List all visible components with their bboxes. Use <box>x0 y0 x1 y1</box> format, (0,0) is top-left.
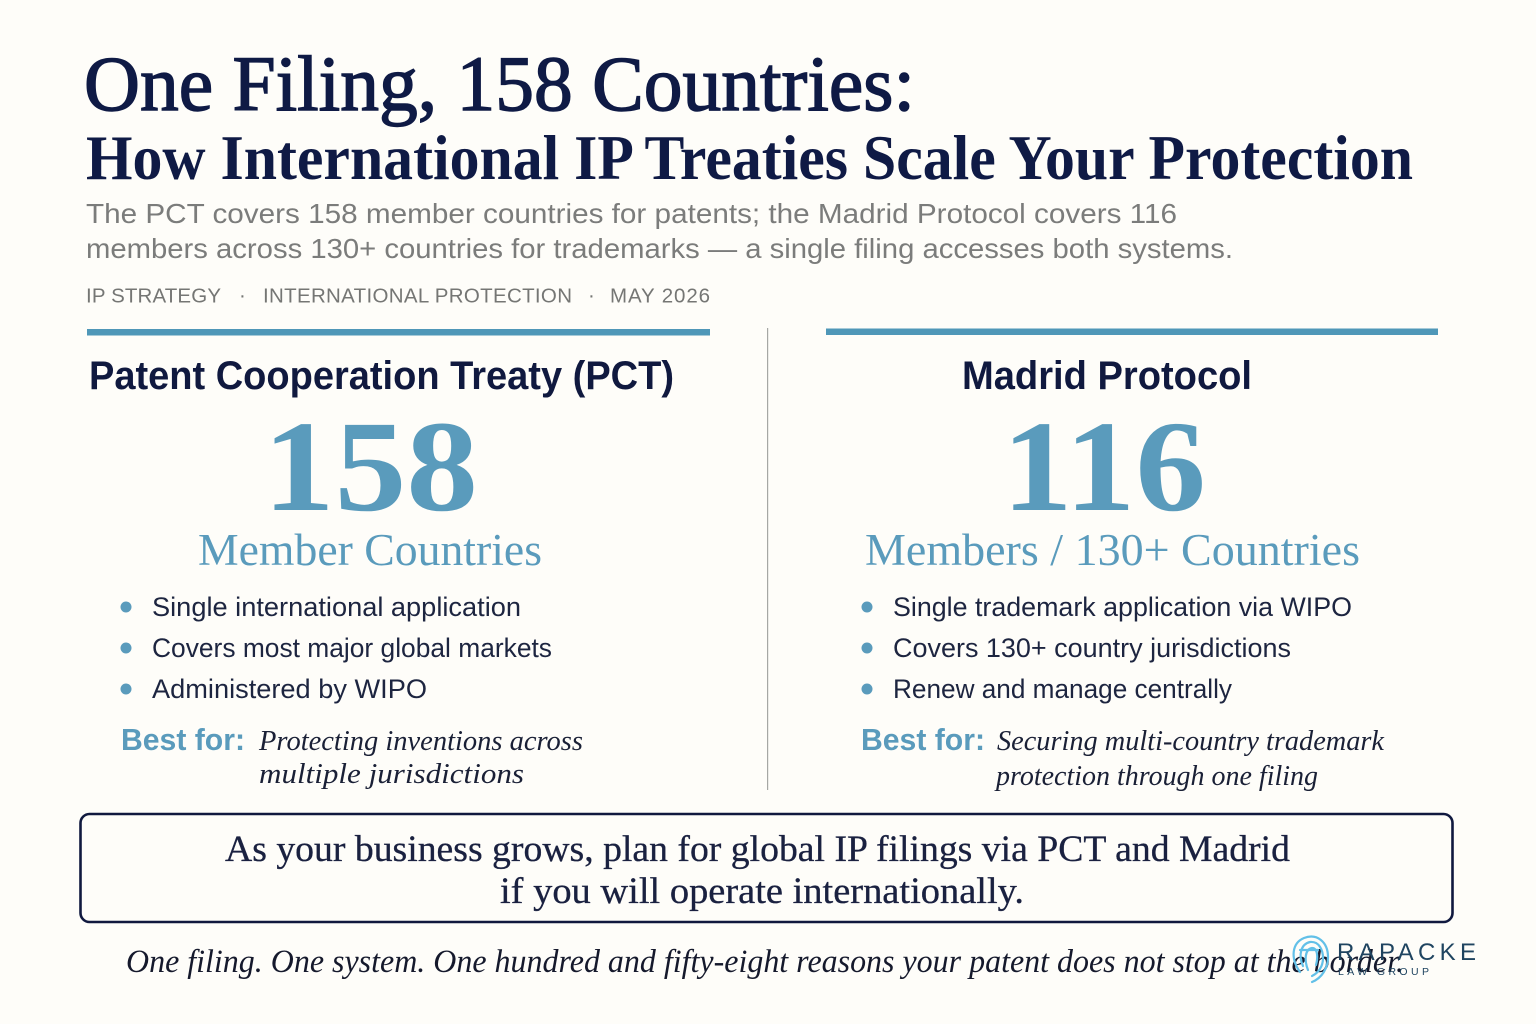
logo <box>1294 937 1476 982</box>
Madrid best for: Best for: <box>861 722 985 757</box>
PCT heading: Patent Cooperation Treaty (PCT) <box>89 354 674 398</box>
Madrid bullets: Renew and manage centrally <box>893 674 1232 704</box>
logo wordmark: LAW GROUP <box>1338 966 1429 978</box>
logo wordmark: RAPACKE <box>1337 939 1476 966</box>
panel: PCT <box>87 329 710 790</box>
title: One Filing, 158 Countries: <box>84 40 915 127</box>
Madrid bullets: Covers 130+ country jurisdictions <box>893 633 1291 663</box>
meta line: · <box>588 284 595 307</box>
title <box>84 40 1413 193</box>
Madrid best for: protection through one filing <box>994 760 1318 792</box>
Madrid heading: Madrid Protocol <box>962 354 1252 398</box>
Madrid number label: Members / 130+ Countries <box>865 525 1360 575</box>
Madrid best for: Securing multi-country trademark <box>997 725 1385 757</box>
Madrid top rule <box>826 328 1438 335</box>
PCT bullets <box>120 592 552 704</box>
logo wordmark <box>1337 939 1476 978</box>
meta line: · <box>239 284 246 307</box>
PCT bullets: Single international application <box>152 592 521 622</box>
callout: if you will operate internationally. <box>500 871 1024 912</box>
PCT bullets: Administered by WIPO <box>152 674 427 704</box>
panel: Madrid <box>826 328 1438 792</box>
subtitle description: The PCT covers 158 member countries for patents; the Madrid Protocol covers 116 <box>86 198 1177 229</box>
Madrid best for <box>861 722 1385 792</box>
closing tagline: One filing. One system. One hundred and fifty-eight reasons your patent does not stop at the border. <box>126 944 1404 980</box>
callout: As your business grows, plan for global IP filings via PCT and Madrid <box>225 829 1290 870</box>
Madrid bullets: Single trademark application via WIPO <box>893 592 1352 622</box>
title: How International IP Treaties Scale Your Protection <box>86 123 1413 193</box>
Madrid big number: 116 <box>1002 395 1206 539</box>
icon: fingerprint <box>1294 937 1328 982</box>
callout <box>80 814 1452 922</box>
PCT best for <box>121 722 583 790</box>
PCT bullets: Covers most major global markets <box>152 633 552 663</box>
meta line <box>86 284 710 308</box>
PCT number label: Member Countries <box>198 525 542 575</box>
Madrid bullets <box>862 592 1352 704</box>
PCT top rule <box>87 329 710 336</box>
PCT best for: Best for: <box>121 722 245 757</box>
PCT best for: Protecting inventions across <box>258 725 583 757</box>
subtitle description: members across 130+ countries for trademarks — a single filing accesses both systems. <box>86 233 1233 264</box>
subtitle description <box>86 198 1233 264</box>
meta line: MAY 2026 <box>610 284 710 308</box>
PCT big number: 158 <box>263 395 478 539</box>
meta line: IP STRATEGY <box>86 284 221 308</box>
PCT best for: multiple jurisdictions <box>259 758 524 790</box>
meta line: INTERNATIONAL PROTECTION <box>263 284 572 308</box>
